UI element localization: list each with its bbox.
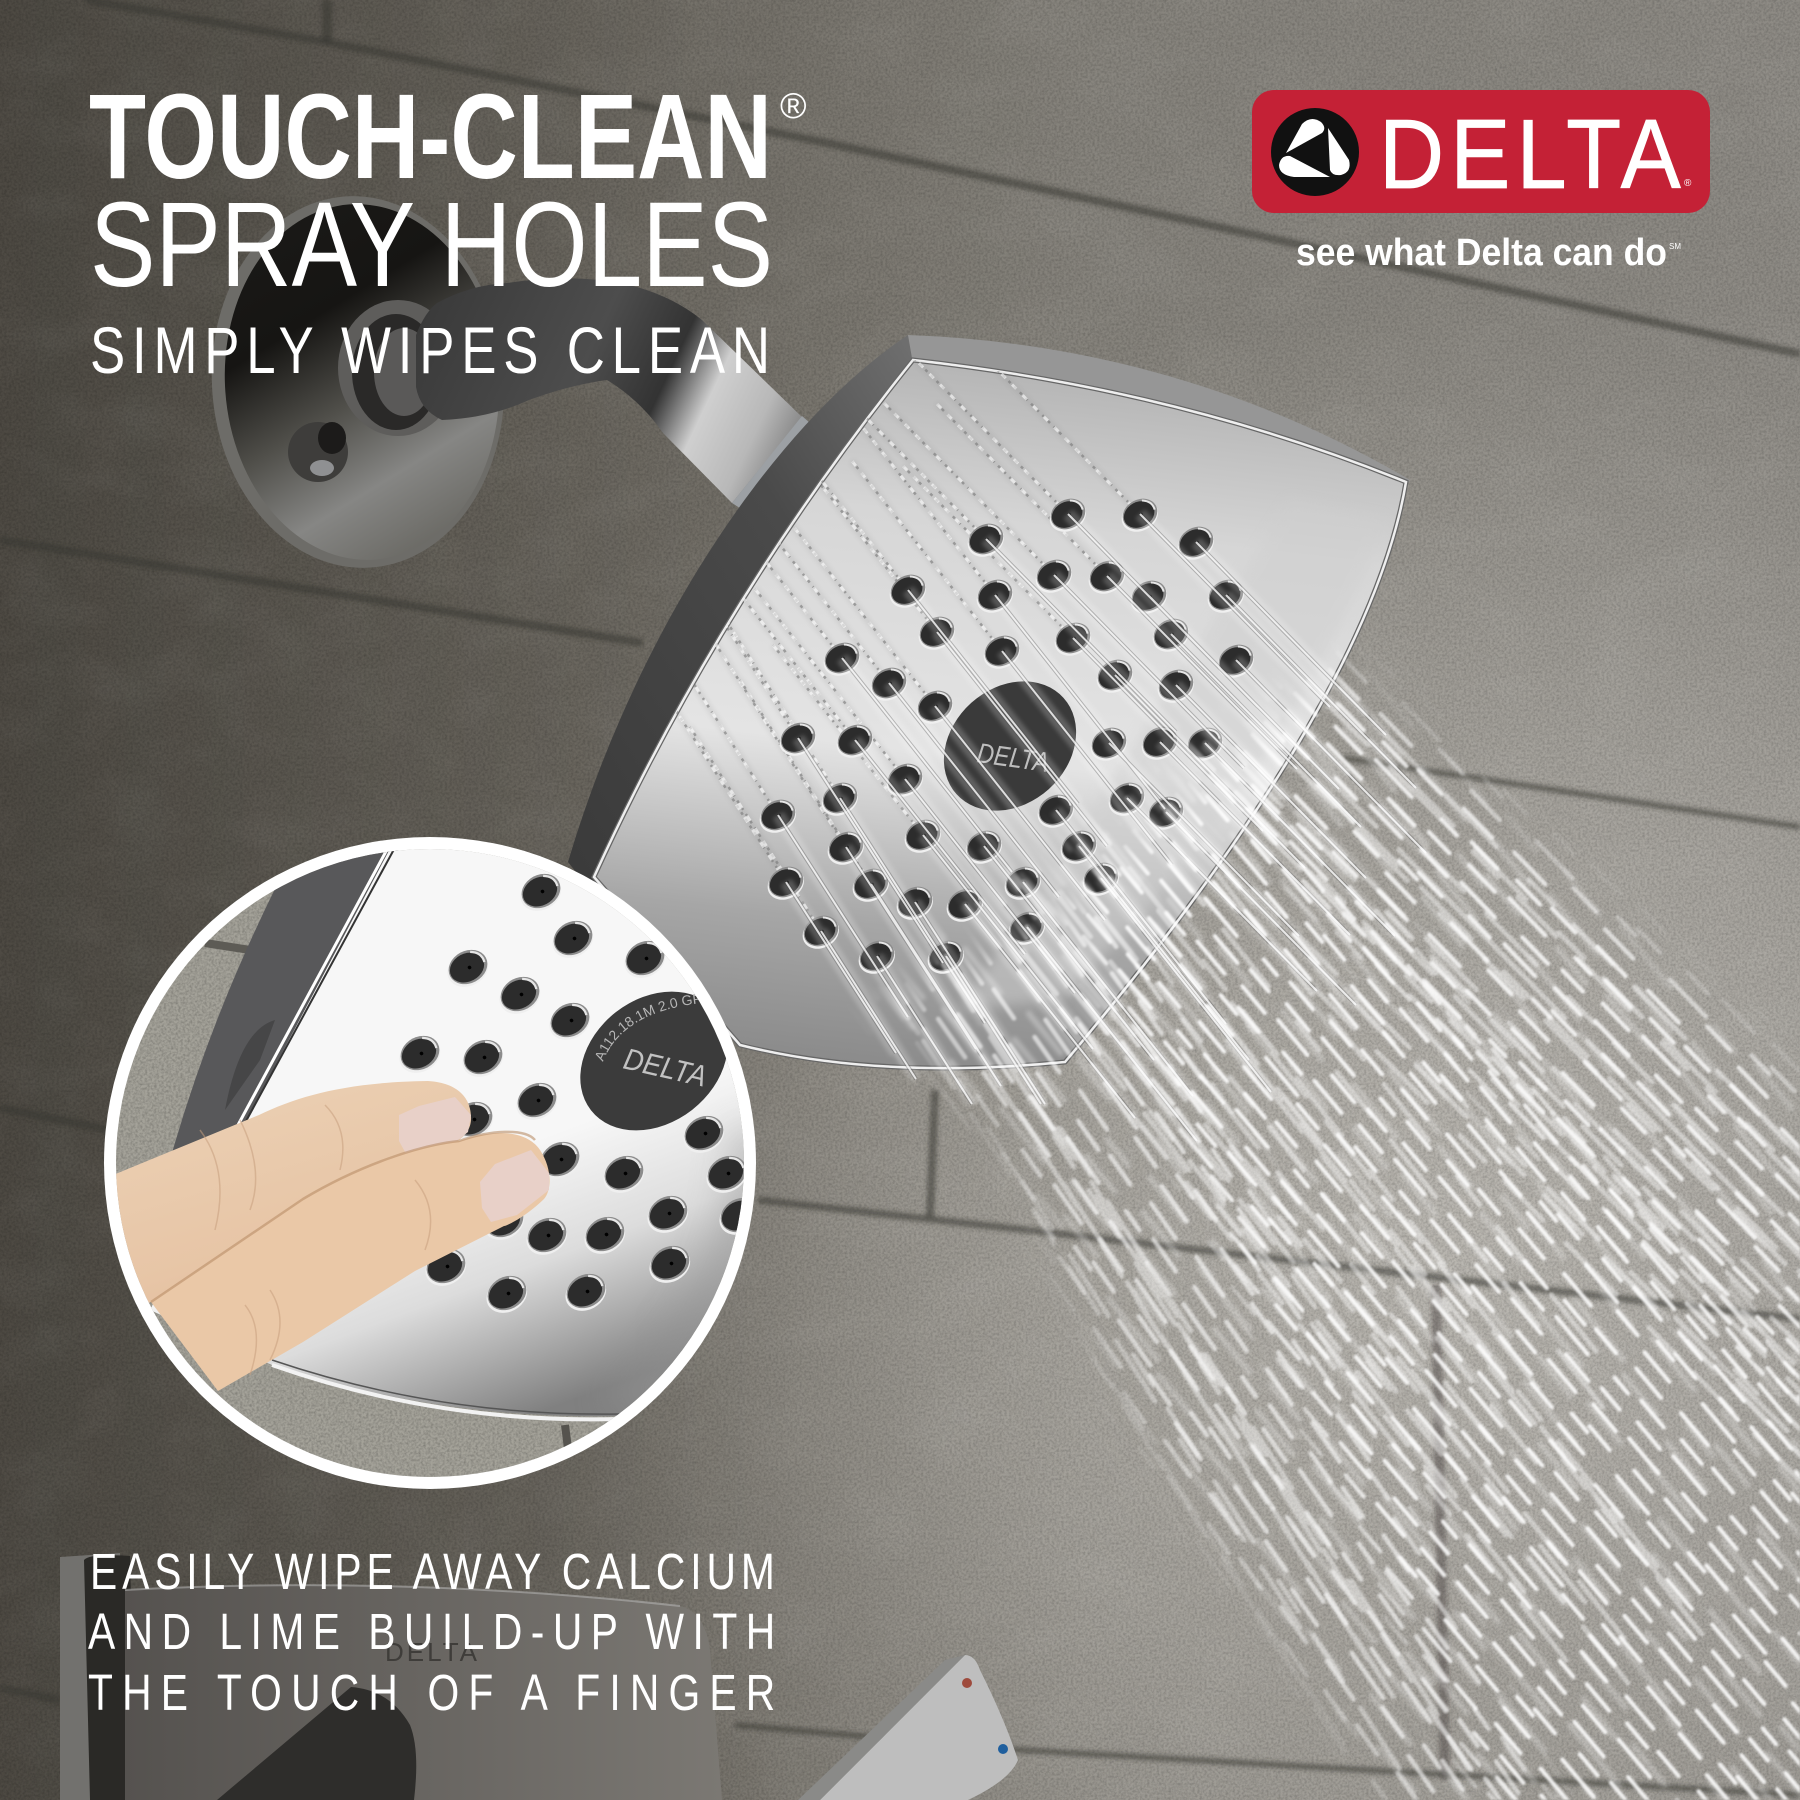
delta logo: ® — [1684, 178, 1692, 189]
plate logo: DELTA — [385, 1637, 478, 1667]
valve trim plate — [60, 1553, 722, 1800]
shower arm flange — [199, 186, 517, 578]
lower finger — [151, 1133, 550, 1391]
head face in circle — [150, 830, 781, 1420]
water spray — [772, 509, 1800, 1800]
circle tile background — [100, 830, 760, 1490]
hot dot — [962, 1678, 972, 1688]
zoom-in circle — [104, 837, 756, 1489]
shower arm — [416, 278, 818, 512]
fingers — [90, 1081, 550, 1391]
service mark: SM — [1669, 242, 1681, 251]
delta emblem — [1271, 108, 1359, 196]
circle spray holes — [393, 867, 766, 1320]
shower head — [568, 335, 1410, 1068]
flange collar — [338, 300, 458, 436]
subtitle: SIMPLY WIPES CLEAN — [90, 313, 770, 387]
tub handle — [798, 1655, 1018, 1800]
upper nail — [399, 1097, 471, 1161]
arm thread — [732, 416, 818, 512]
delta logo: DELTA — [1379, 100, 1681, 209]
delta logo — [1252, 90, 1710, 213]
plate handle — [217, 1687, 416, 1800]
bottom caption — [88, 1543, 775, 1721]
head side in circle — [170, 840, 400, 1160]
title: spray holes: SPRAY HOLES — [90, 176, 773, 312]
bottom caption: THE TOUCH OF A FINGER — [88, 1664, 775, 1721]
flange screw — [288, 422, 348, 482]
badge in circle — [580, 992, 726, 1130]
head body side — [568, 335, 913, 895]
registered mark: ® — [780, 85, 807, 126]
upper finger — [90, 1081, 471, 1330]
lower nail — [480, 1150, 549, 1222]
head top rim — [908, 335, 1410, 486]
spray holes — [754, 493, 1260, 980]
cold dot — [998, 1744, 1008, 1754]
center badge on head — [918, 655, 1102, 837]
badge in circle: A112.18.1M 2.0 GPM — [596, 994, 698, 1062]
badge in circle: DELTA — [620, 1043, 710, 1094]
bottom caption: AND LIME BUILD-UP WITH — [88, 1603, 775, 1660]
head face — [594, 342, 1406, 1068]
center badge on head: DELTA — [975, 737, 1051, 778]
bottom caption: EASILY WIPE AWAY CALCIUM — [90, 1543, 775, 1600]
title: touch-clean: TOUCH-CLEAN — [89, 68, 772, 204]
tagline: see what Delta can do — [1296, 232, 1667, 274]
